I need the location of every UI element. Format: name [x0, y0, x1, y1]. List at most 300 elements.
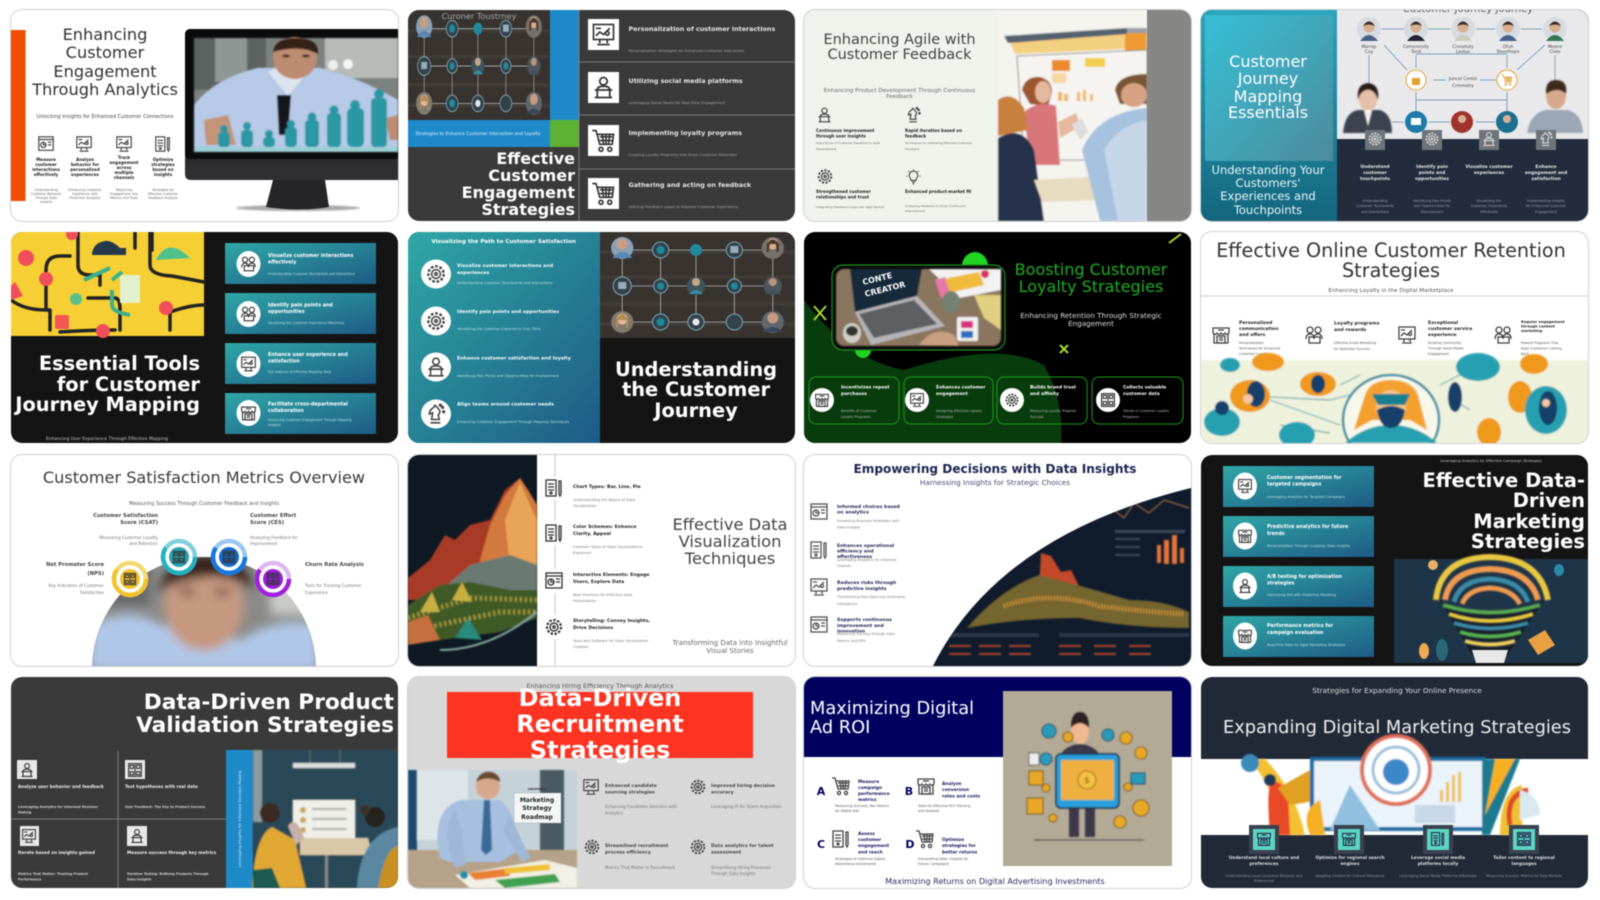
teal left panel — [1200, 10, 1336, 221]
strategy labels: Exceptional — [1428, 320, 1458, 326]
metric labels left: Key Indicators of Customer — [48, 583, 104, 588]
customer journey map image: Cronetuty — [1452, 44, 1474, 50]
navy header band — [804, 677, 1190, 757]
title — [1422, 469, 1584, 553]
subtitle — [1020, 311, 1161, 328]
title: Understanding — [614, 358, 777, 381]
red title block — [446, 692, 752, 758]
tool cards: Identify pain points and — [268, 302, 333, 308]
steps list: Understanding Customer Touchpoints and Interactions — [456, 281, 552, 285]
metric labels left — [46, 513, 158, 595]
descriptions: Development — [816, 147, 837, 151]
title: Customer — [488, 166, 575, 185]
descriptions: Importance of Customer Feedback in Agile — [816, 141, 880, 145]
dark green blob background — [804, 300, 1061, 443]
key point labels: based on — [152, 167, 173, 172]
panel: Maximizing Digital Ad ROI — [804, 677, 1190, 888]
labels: Analyze user behavior and feedback — [18, 784, 104, 789]
tactic descriptions — [1225, 874, 1562, 883]
panel heading: Visualizing the Path to Customer Satisfaction — [431, 239, 575, 245]
strategy labels: through content — [1520, 324, 1555, 328]
key points: touchpoints — [1360, 176, 1390, 182]
footer subtitle: Enhancing User Experience Through Effective Mapping — [46, 436, 168, 442]
benefit cards: Trends in Customer Loyalty — [1122, 409, 1169, 413]
technique descriptions: Understanding the Basics of Data — [572, 498, 634, 502]
man with roadmap photo: Strategy — [522, 805, 551, 812]
list descriptions: Choices — [836, 564, 850, 568]
journey network image — [600, 232, 794, 338]
banner text: Strategies to Enhance Customer Interaction and Loyalty — [415, 131, 540, 137]
strategy cards: Real-Time Data for Agile Marketing Strategies — [1266, 643, 1345, 647]
benefit cards: Loyalty Programs — [840, 415, 870, 419]
person with tablet illustration — [1002, 691, 1172, 866]
technique descriptions: Explained — [572, 551, 591, 555]
customer journey map image: Marrop — [1361, 44, 1376, 50]
title: Customer Feedback — [827, 47, 972, 63]
descriptions: Implementing Insights — [1527, 199, 1565, 203]
benefit labels: accuracy — [710, 790, 733, 796]
man with roadmap photo: CREATING A — [527, 787, 547, 791]
panel: Boosting Customer Loyalty Strategies — [803, 231, 1192, 444]
subtitle: Enhancing Hiring Efficiency Through Analytics — [526, 682, 674, 690]
technique descriptions: Common Types of Data Visualizations — [572, 545, 642, 549]
subtitle — [823, 88, 975, 100]
list descriptions: Enhancing Business Strategies with — [836, 519, 899, 523]
tactic descriptions: Adapting Content for Cultural Relevance — [1315, 874, 1384, 878]
man with roadmap photo — [408, 770, 576, 888]
benefit descriptions: Metrics That Matter in Recruitment — [604, 865, 675, 870]
key point labels: Measure — [36, 157, 56, 162]
tactic labels: Leverage social media — [1410, 855, 1465, 861]
title: Strategies — [1342, 259, 1440, 282]
key point labels: across — [116, 165, 132, 170]
option icons — [832, 778, 934, 848]
option letters: B — [904, 785, 913, 798]
technique labels: Interactive Elements: Engage — [572, 572, 649, 578]
benefit cards: purchases — [840, 391, 867, 397]
tactic labels: platforms locally — [1417, 861, 1458, 867]
technique descriptions: Tools and Software for Data Visualization — [572, 639, 648, 643]
list labels — [836, 504, 899, 634]
title: Visualization — [678, 532, 781, 551]
technique labels: Color Schemes: Enhance — [572, 524, 636, 530]
tool cards: Visualizing the Customer Experience Effectively — [268, 321, 344, 325]
metric labels right — [250, 513, 363, 595]
title: Data-Driven Product — [143, 690, 394, 715]
option labels: metrics — [858, 797, 876, 803]
key point labels: insights — [153, 172, 172, 177]
steps list: Align teams around customer needs — [456, 402, 554, 408]
title: Essentials — [1227, 103, 1308, 122]
technique labels: Storytelling: Convey Insights, — [572, 618, 650, 624]
descriptions: Identifying Pain Points — [1413, 199, 1450, 203]
metric labels right: Analyzing Feedback for — [250, 535, 297, 540]
bottom navy section icons — [1364, 130, 1556, 150]
watercolor team at whiteboard illustration — [997, 10, 1147, 221]
subtitle: Feedback — [886, 94, 913, 100]
metric labels left: Net Promoter Score — [46, 562, 104, 568]
key point labels: behavior for — [70, 162, 99, 167]
tool cards: satisfaction — [268, 358, 300, 364]
title — [614, 358, 777, 422]
title: Customer Satisfaction Metrics Overview — [42, 468, 365, 487]
benefit cards: Collects valuable — [1122, 384, 1166, 390]
steps list: experiences — [456, 270, 489, 276]
descriptions: Engagement — [1535, 210, 1557, 214]
title: Marketing — [1473, 510, 1584, 533]
title: Effective Data — [672, 515, 787, 534]
option labels: customer — [858, 837, 882, 843]
descriptions: Understanding — [1362, 199, 1387, 203]
tool cards: Visualize customer interactions — [268, 253, 353, 259]
technique descriptions: Presentation — [572, 599, 596, 603]
descriptions: Improvement — [1420, 210, 1444, 214]
blue side bar with vertical text — [226, 750, 252, 888]
steps list: Identify pain points and opportunities — [456, 309, 559, 315]
descriptions: Leveraging Analytics for Informed Decision- — [18, 805, 99, 809]
curved dark data terrain image — [928, 485, 1190, 666]
descriptions: Techniques for Gathering Effective Customer — [904, 141, 972, 145]
benefit cards: Programs — [1122, 415, 1139, 419]
key point labels: experiences — [71, 172, 99, 177]
option descriptions: Advertising Investments — [834, 862, 876, 866]
title — [516, 684, 683, 764]
tool cards: Enhancing Customer Engagement Through Mapping — [268, 418, 351, 422]
tool cards: collaboration — [268, 408, 304, 414]
customer journey map image: Ofuh — [1502, 44, 1513, 50]
customer journey map image: Leotus — [1455, 49, 1470, 55]
title — [810, 698, 974, 738]
key point descriptions: Effective Customer — [147, 192, 178, 196]
key points: Understand — [1360, 164, 1389, 170]
panel: Effective Customer Engagement Strategies — [407, 9, 796, 222]
benefit cards: and affinity — [1030, 391, 1058, 397]
option labels: conversion — [942, 787, 969, 793]
strategy descriptions: for Retention Success — [1334, 347, 1370, 351]
subtitle: Enhancing Loyalty in the Digital Marketplace — [1328, 288, 1454, 294]
tool cards: Insights — [268, 423, 280, 427]
metric labels right: Experience — [304, 590, 328, 595]
footer caption: Maximizing Returns on Digital Advertising Investments — [885, 877, 1104, 886]
strategy descriptions: Personalization — [1238, 341, 1264, 345]
technique labels: Users, Explore Data — [572, 579, 624, 585]
key points: Enhanced product-market fit — [904, 189, 971, 194]
key point descriptions — [30, 188, 178, 204]
timeline icons — [542, 476, 564, 639]
title: Customer — [1229, 52, 1307, 71]
descriptions: Analyzing Feedback to Drive Continuous — [904, 204, 966, 208]
title — [13, 352, 200, 416]
panel: Enhancing Agile with Customer Feedback — [804, 10, 1190, 221]
option labels: Optimize — [942, 837, 964, 843]
title: Validation Strategies — [136, 713, 394, 738]
strategy cards: Predictive analytics for future — [1266, 524, 1349, 530]
list labels: Reduces risks through — [836, 580, 896, 586]
benefit labels — [604, 783, 774, 856]
key points: Strengthened customer — [816, 189, 870, 194]
key point labels: interactions — [32, 167, 60, 172]
subtitle: Understanding Your — [1211, 163, 1324, 177]
tool cards: effectively — [268, 260, 297, 266]
option labels: performance — [858, 791, 889, 797]
descriptions: Customer Experience — [1470, 204, 1507, 208]
tactic labels: preferences — [1249, 861, 1278, 867]
steps list: Visualize customer interactions and — [456, 263, 553, 269]
title: for Customer — [56, 373, 200, 396]
metric labels left: Satisfaction — [79, 590, 104, 595]
metric labels left: and Retention — [129, 541, 158, 546]
title: Ad ROI — [810, 717, 870, 738]
key points: through user insights — [816, 134, 866, 138]
option descriptions: and Analysis — [918, 809, 939, 813]
strategy rows: Implementing loyalty programs — [628, 129, 742, 137]
descriptions: Visualizing the — [1476, 199, 1501, 203]
subtitle: Transforming Data into Insightful — [671, 639, 787, 647]
option letters — [816, 785, 914, 851]
key points: customer — [1363, 170, 1387, 176]
labels: Measure success through key metrics — [126, 850, 216, 855]
strategy descriptions: Through Social Media — [1426, 346, 1463, 350]
strategy cards: Performance metrics for — [1266, 623, 1333, 629]
yellow road map illustration — [10, 228, 204, 338]
orange accent bar — [10, 30, 25, 201]
technique labels: Drive Decisions — [572, 625, 613, 631]
list labels: effectiveness — [836, 554, 872, 560]
option labels: better returns — [942, 850, 977, 856]
key point labels — [32, 155, 175, 180]
list descriptions: Transforming Raw Data into Actionable — [836, 595, 905, 599]
steps list: Identifying Pain Points and Opportunities for Improvement — [456, 374, 559, 378]
descriptions: Data Insights — [126, 878, 151, 882]
tool cards: opportunities — [268, 309, 304, 315]
title: Driven — [1512, 489, 1584, 512]
man with roadmap photo: Roadmap — [521, 814, 553, 821]
strategy labels — [1238, 320, 1564, 338]
descriptions: Metrics That Matter: Tracking Product — [18, 872, 88, 876]
icon tiles — [1248, 825, 1538, 854]
title: Loyalty Strategies — [1018, 277, 1163, 296]
customer journey map image: Moono — [1547, 44, 1562, 50]
teal gradient panel — [408, 232, 600, 443]
option labels: engagement — [858, 843, 889, 849]
man with roadmap photo: Marketing — [519, 797, 554, 804]
strategy labels: communication — [1238, 326, 1278, 332]
benefit cards: engagement — [936, 391, 968, 397]
strategy descriptions: Reward Programs That — [1520, 341, 1559, 345]
list labels: predictive insights — [836, 586, 886, 592]
key point descriptions: Metrics and Tools — [110, 196, 138, 200]
benefit cards: Success — [1030, 415, 1043, 419]
strategy descriptions: Back — [1520, 352, 1529, 356]
title: Enhancing Agile with — [823, 32, 975, 48]
tactic labels: engines — [1340, 861, 1359, 867]
descriptions: Making — [18, 810, 32, 814]
benefit descriptions: Streamlining Hiring Processes — [710, 865, 770, 870]
option labels: rates and costs — [942, 794, 980, 800]
key point descriptions: Engagement: Key — [109, 192, 138, 196]
subtitle: Customers' — [1235, 176, 1300, 190]
laptop photo — [832, 265, 1004, 350]
strategy descriptions: Engagement — [1428, 352, 1449, 356]
strategy rows — [588, 19, 775, 209]
tool cards — [224, 243, 376, 434]
metric labels left: (NPS) — [87, 571, 104, 577]
panel: Data-Driven Recruitment Strategies — [408, 677, 794, 888]
option letters: D — [905, 838, 914, 851]
title: Boosting Customer — [1014, 260, 1167, 279]
panel: Essential Tools for Customer Journey Mapping — [10, 231, 399, 444]
customer journey map image: Tend — [1410, 49, 1421, 55]
strategy cards: trends — [1266, 531, 1284, 537]
strategy cards: targeted campaigns — [1266, 482, 1321, 488]
benefit labels: sourcing strategies — [604, 790, 654, 796]
title: Essential Tools — [38, 352, 200, 375]
panel: Empowering Decisions with Data Insights — [804, 455, 1190, 666]
benefit icons — [583, 780, 704, 853]
benefit cards: Designing Effective Loyalty — [936, 409, 982, 413]
list descriptions: Intelligence — [836, 602, 857, 606]
tactic descriptions: Leveraging Social Media Platforms Effectively — [1399, 874, 1476, 878]
strategy labels: Regular engagement — [1520, 320, 1564, 324]
list icons — [810, 504, 826, 632]
metric labels right: Churn Rate Analysis — [304, 562, 363, 568]
option labels: Measure — [858, 779, 879, 785]
tool cards: Enhance user experience and — [268, 352, 348, 358]
key point descriptions: Strategies for — [152, 188, 174, 192]
panel: Customer Journey Mapping Essentials — [1200, 10, 1588, 221]
key points: opportunities — [1415, 176, 1449, 182]
strategy rows: Gathering and acting on feedback — [628, 181, 751, 189]
option labels — [858, 779, 980, 856]
title: Enhancing — [62, 25, 147, 44]
subtitle — [671, 639, 787, 655]
panel: Effective Data Visualization Techniques — [408, 455, 794, 666]
benefit descriptions: Enhancing Candidate Selection with — [604, 804, 677, 809]
key point labels: strategies — [151, 162, 175, 167]
strategy rows: Utilizing social media platforms — [628, 77, 742, 85]
metric labels left: Customer Satisfaction — [93, 513, 158, 519]
option descriptions: Future Campaigns — [918, 862, 949, 866]
tactic labels: languages — [1511, 861, 1536, 867]
person with tablet illustration: $ — [1084, 776, 1089, 786]
key point descriptions: Through Data — [34, 196, 56, 200]
list descriptions: Data Insights — [836, 526, 860, 530]
tactic labels — [1228, 855, 1555, 867]
key points: experiences — [1473, 170, 1504, 176]
list labels: Enhances operational — [836, 543, 894, 549]
icons row — [38, 137, 169, 151]
option descriptions: Tools for Effective ROI Tracking — [916, 804, 970, 808]
key point descriptions: Insights — [39, 200, 52, 204]
funnel illustration — [1394, 557, 1588, 663]
technique descriptions: Creation — [572, 645, 589, 649]
key point descriptions: Measuring — [115, 188, 132, 192]
descriptions — [1356, 199, 1566, 214]
title: Mapping — [1233, 87, 1302, 106]
journey network image: Curoner Toustrney — [441, 11, 516, 21]
key point labels: personalized — [70, 167, 99, 172]
key points: relationships and trust — [816, 194, 868, 200]
strategy cards — [1222, 466, 1374, 657]
green decorative dots — [854, 252, 988, 358]
sparkle accents — [814, 234, 1180, 353]
key point labels: customer — [35, 162, 56, 167]
customer journey map image: Clote — [1549, 49, 1560, 55]
key point descriptions: Enhancing Customer — [68, 188, 102, 192]
strategy descriptions: Effective Email Marketing — [1334, 341, 1376, 345]
title: Effective — [496, 149, 575, 168]
metric labels right: Improvement — [250, 541, 277, 546]
title: Journey — [652, 399, 738, 422]
grid lines — [10, 751, 226, 888]
list labels: Supports continuous — [836, 617, 892, 623]
subtitle: Visual Stories — [706, 647, 754, 655]
key point labels: Track — [117, 155, 130, 160]
key points: Identify pain — [1416, 164, 1447, 170]
technique descriptions — [572, 498, 648, 649]
panel: Customer Satisfaction Metrics Overview — [10, 455, 398, 666]
benefit labels: Improved hiring decision — [710, 783, 774, 789]
option descriptions: Strategies to Optimize Digital — [834, 857, 885, 861]
strategy cards: Customer segmentation for — [1266, 475, 1342, 481]
labels — [18, 784, 216, 855]
customer journey map image — [1336, 4, 1588, 139]
descriptions: and Interactions — [1361, 210, 1389, 214]
benefit cards: Benefits of Customer — [840, 409, 877, 413]
title: Customer — [65, 43, 144, 62]
strategy descriptions — [1238, 341, 1561, 356]
key point labels: multiple — [114, 170, 133, 175]
tool cards: Facilitate cross-departmental — [268, 402, 348, 408]
key point descriptions: Feedback Analysis — [148, 196, 178, 200]
title: Effective Data- — [1422, 469, 1584, 492]
key points: Continuous improvement — [816, 128, 874, 133]
strategy icons — [1212, 327, 1510, 343]
title: Engagement — [53, 62, 156, 81]
title: Journey Mapping — [13, 393, 200, 416]
subtitle: Harnessing Insights for Strategic Choices — [919, 478, 1070, 487]
strategy rows: Utilizing Feedback Loops to Improve Customer Experience — [628, 205, 738, 209]
list descriptions: Leveraging Analytics for Informed — [836, 558, 896, 562]
descriptions: Effectively — [1480, 210, 1497, 214]
key point labels: engagement — [109, 160, 138, 165]
technique descriptions: Best Practices for Effective Data — [572, 593, 632, 597]
title — [823, 32, 975, 63]
steps list — [420, 260, 571, 428]
title: Strategies — [481, 200, 574, 219]
descriptions: and Opportunities for — [1413, 204, 1450, 208]
benefit cards: Builds brand trust — [1030, 384, 1076, 390]
strategy cards: A/B testing for optimization — [1266, 574, 1342, 580]
journey network image — [408, 10, 550, 120]
title: Journey — [1236, 69, 1298, 88]
title — [672, 515, 787, 568]
blurred portrait arch — [90, 555, 320, 670]
metric labels left: Measuring Customer Loyalty — [99, 535, 158, 540]
strategy descriptions: Building Community — [1428, 341, 1461, 345]
key points: satisfaction — [1531, 176, 1560, 182]
subtitle: Engagement — [1068, 319, 1114, 328]
benefit cards: Measuring Loyalty Program — [1030, 409, 1077, 413]
grey side strip — [1146, 10, 1190, 221]
option descriptions: Interpreting Data: Insights for — [918, 857, 969, 861]
list labels: Informed choices based — [836, 504, 899, 510]
key point labels: Optimize — [152, 157, 173, 162]
metric rings — [114, 541, 288, 595]
descriptions: for Enhanced Customer — [1525, 204, 1566, 208]
subtitle: Strategies for Expanding Your Online Presence — [1312, 686, 1482, 695]
descriptions: Improvement — [904, 209, 926, 213]
